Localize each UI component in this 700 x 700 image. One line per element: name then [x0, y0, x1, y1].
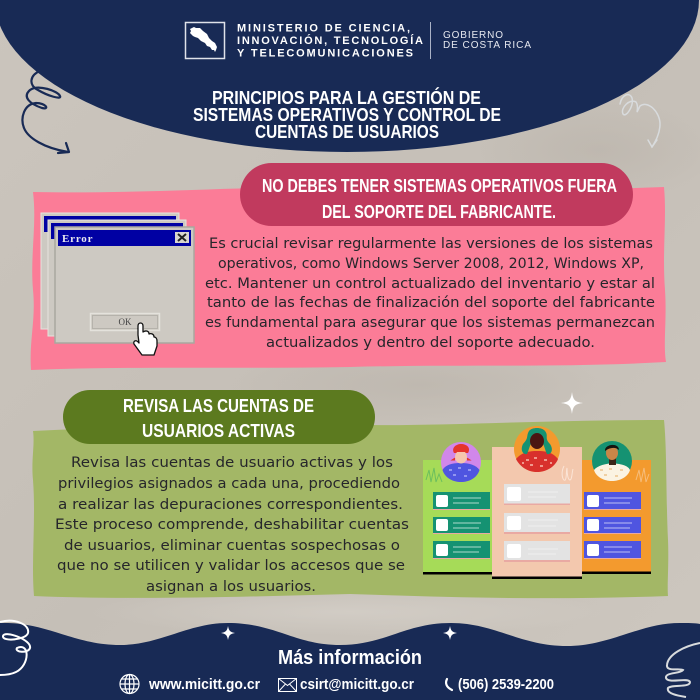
icon: sparkle left — [221, 626, 235, 640]
avatar: green — [592, 441, 632, 481]
pill: pink heading — [240, 163, 633, 226]
text block: green: a realizar las depuraciones correspondientes. — [58, 497, 403, 513]
logo: Ministerio — [186, 22, 531, 60]
title: PRINCIPIOS PARA LA GESTIÓN DE — [212, 87, 481, 108]
icon: error windows — [41, 213, 194, 355]
text block: pink: es fundamental para asegurar que los sistemas permanezcan — [205, 315, 655, 331]
icon: sparkle right — [443, 626, 457, 640]
card: peach — [492, 447, 582, 579]
text block: pink: actualizados y dentro del soporte adecuado. — [266, 335, 595, 351]
logo: Ministerio: DE COSTA RICA — [443, 40, 531, 51]
card: green — [423, 460, 493, 574]
title: CUENTAS DE USUARIOS — [255, 122, 439, 142]
text block: pink: tanto de las fechas de finalización del soporte del fabricante — [207, 295, 655, 311]
icon: envelope — [278, 678, 296, 692]
logo: Ministerio: Y TELECOMUNICACIONES — [237, 48, 413, 60]
icon: error windows: OK — [118, 317, 132, 327]
squiggle arrow: navy — [22, 71, 69, 153]
text block: green: Este proceso comprende, deshabilitar cuentas — [55, 517, 409, 533]
squiggle: pale right — [666, 643, 700, 697]
panel: pink — [31, 163, 666, 370]
text block: green: Revisa las cuentas de usuario activas y los — [71, 455, 393, 471]
text block: green: de usuarios, eliminar cuentas sospechosas o — [64, 538, 400, 554]
text block: green — [55, 455, 409, 595]
pill: olive heading: REVISA LAS CUENTAS DE — [123, 395, 314, 416]
pill: pink heading: DEL SOPORTE DEL FABRICANTE. — [322, 201, 556, 222]
text block: pink — [205, 236, 655, 351]
footer navy wave — [0, 623, 700, 700]
text block: pink: etc. Mantener un control actualizado del inventario y estar al — [205, 276, 655, 292]
icon: error windows: Error — [62, 233, 93, 245]
text block: green: asignan a los usuarios. — [146, 579, 316, 595]
panel: green — [32, 390, 668, 598]
logo: Ministerio: GOBIERNO — [443, 30, 503, 41]
squiggle arrow: pale — [620, 95, 660, 147]
squiggle: white left — [0, 621, 30, 675]
icon: globe — [120, 674, 139, 694]
title — [193, 87, 501, 142]
icon: phone — [446, 679, 452, 690]
icon: sparkle — [561, 392, 583, 414]
text block: pink: operativos, como Windows Server 2008, 2012, Windows XP, — [218, 256, 644, 272]
footer heading: Más información — [278, 647, 422, 669]
text block: green: privilegios asignados a cada una, procediendo — [58, 476, 400, 492]
logo: Ministerio: INNOVACIÓN, TECNOLOGÍA — [237, 34, 423, 47]
header navy ellipse — [0, 0, 699, 152]
pill: olive heading: USUARIOS ACTIVAS — [142, 420, 295, 441]
illustration: user cards — [423, 426, 651, 579]
text block: pink: Es crucial revisar regularmente las versiones de los sistemas — [209, 236, 653, 252]
logo: Ministerio: MINISTERIO DE CIENCIA, — [237, 22, 410, 34]
text block: green: que no se utilicen y validar los accesos que se — [57, 558, 405, 574]
contact: website: www.micitt.go.cr — [148, 676, 260, 693]
card: orange — [582, 460, 651, 574]
pill: olive heading — [63, 390, 375, 444]
avatar: orange — [514, 426, 560, 472]
title: SISTEMAS OPERATIVOS Y CONTROL DE — [193, 105, 501, 125]
contact: email: csirt@micitt.go.cr — [300, 676, 414, 693]
avatar: purple — [441, 442, 481, 482]
contact: phone: (506) 2539-2200 — [458, 676, 554, 693]
